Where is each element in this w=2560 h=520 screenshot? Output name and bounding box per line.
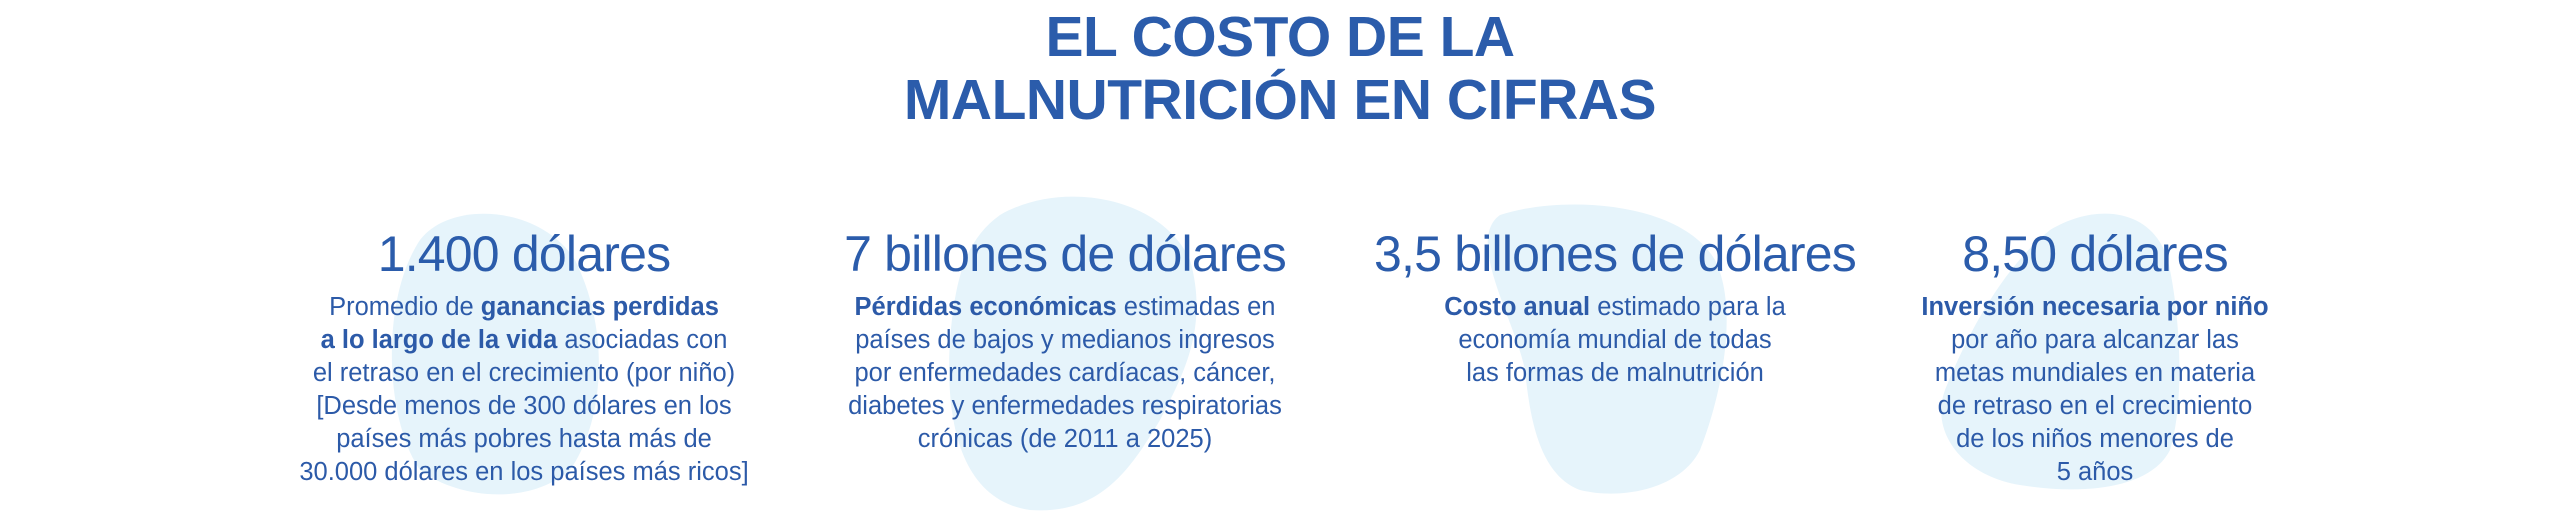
panel: 8,50 dólares [1921,226,2269,486]
title: EL COSTO DE LA [1045,5,1515,69]
text block: Promedio de ganancias perdidas [329,293,719,321]
title: MALNUTRICIÓN EN CIFRAS [904,68,1656,132]
text block: crónicas (de 2011 a 2025) [918,425,1212,453]
text block [1444,293,1786,387]
text block: a lo largo de la vida asociadas con [321,326,727,354]
text block: de retraso en el crecimiento [1938,392,2252,420]
blob 2 [949,197,1197,510]
text block [299,293,749,486]
text block: Costo anual estimado para la [1444,293,1786,321]
text block: el retraso en el crecimiento (por niño) [313,359,735,387]
text block: las formas de malnutrición [1466,359,1764,387]
text block: 5 años [2057,458,2133,486]
text block [848,293,1282,453]
text block: por enfermedades cardíacas, cáncer, [854,359,1276,387]
text block: por año para alcanzar las [1951,326,2239,354]
heading: 3,5 billones de dólares [1374,226,1856,282]
blob 3 [1488,204,1727,494]
blob 4 [1941,214,2179,489]
text block: [Desde menos de 300 dólares en los [316,392,732,420]
text block: diabetes y enfermedades respiratorias [848,392,1282,420]
text block: de los niños menores de [1956,425,2234,453]
panel: 1.400 dólares [299,226,749,486]
heading: 7 billones de dólares [844,226,1286,282]
text block: países de bajos y medianos ingresos [855,326,1275,354]
text block: 30.000 dólares en los países más ricos] [299,458,749,486]
text block: economía mundial de todas [1458,326,1772,354]
title [904,5,1656,132]
text block: Inversión necesaria por niño [1921,293,2269,321]
panel: 7 billones [844,226,1286,453]
text block [1921,293,2269,486]
blob 1 [392,214,599,494]
text block: Pérdidas económicas estimadas en [855,293,1275,321]
text block: países más pobres hasta más de [336,425,712,453]
heading: 8,50 dólares [1962,226,2228,282]
heading: 1.400 dólares [378,226,670,282]
panel: 3,5 billones [1374,226,1856,387]
text block: metas mundiales en materia [1935,359,2255,387]
